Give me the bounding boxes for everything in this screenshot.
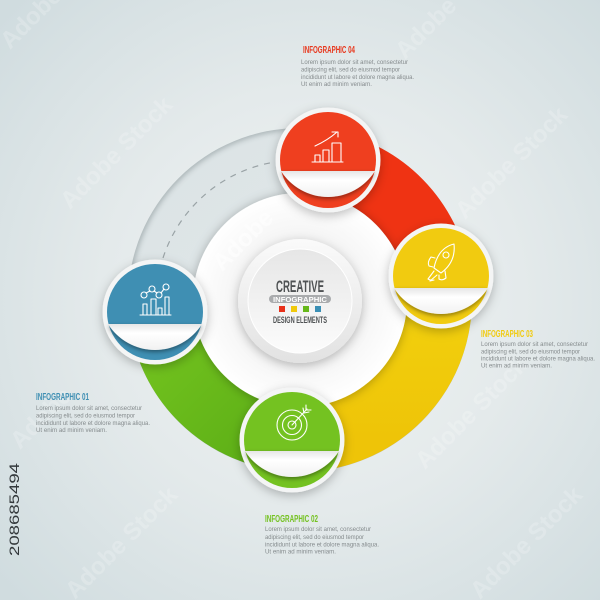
watermark: Adobe Stock <box>450 101 573 224</box>
text block: infographic 01: Ut enim ad minim veniam. <box>36 428 107 434</box>
text block: infographic 02: Lorem ipsum dolor sit amet, consectetur <box>265 527 371 533</box>
ring segment: yellow <box>292 276 439 439</box>
text block: infographic 02: adipiscing elit, sed do eiusmod tempor <box>265 535 364 541</box>
text block: infographic 03: incididunt ut labore et dolore magna aliqua. <box>481 356 595 362</box>
center subtitle: DESIGN ELEMENTS <box>273 315 327 326</box>
text block: infographic 04: adipiscing elit, sed do eiusmod tempor <box>301 68 400 74</box>
text block: infographic 04: incididunt ut labore et dolore magna aliqua. <box>301 75 414 81</box>
inner white disc <box>193 193 407 407</box>
ring segment: green <box>161 312 292 439</box>
icon: growth chart <box>312 132 343 162</box>
center title: CREATIVE <box>276 278 324 296</box>
ring: gray base <box>127 127 473 473</box>
watermark: Adobe Stock <box>195 141 318 264</box>
text block: infographic 04: INFOGRAPHIC 04 <box>303 45 355 56</box>
text block: infographic 01: adipiscing elit, sed do eiusmod tempor <box>36 414 135 420</box>
text block: infographic 03: INFOGRAPHIC 03 <box>481 329 533 340</box>
text block: infographic 01: Lorem ipsum dolor sit amet, consectetur <box>36 406 142 412</box>
text block: infographic 01: INFOGRAPHIC 01 <box>36 392 89 403</box>
inner disc watermark: Adobe <box>207 204 279 276</box>
text block: infographic 01 <box>36 392 150 434</box>
badge: green <box>240 388 344 492</box>
text block: infographic 04 <box>301 45 414 88</box>
text block: infographic 04: Ut enim ad minim veniam. <box>301 82 372 88</box>
center colour squares <box>279 306 321 312</box>
icon: target <box>277 405 311 440</box>
watermark: Adobe Stock <box>410 351 533 474</box>
text block: infographic 03 <box>481 329 595 370</box>
text block: infographic 02: Ut enim ad minim veniam. <box>265 550 336 556</box>
badge: red <box>276 108 380 212</box>
center disc <box>238 239 362 363</box>
text block: infographic 02: INFOGRAPHIC 02 <box>265 514 318 525</box>
text block: infographic 01: incididunt ut labore et dolore magna aliqua. <box>36 421 150 427</box>
text block: infographic 02 <box>265 514 379 556</box>
icon: rocket <box>428 244 454 281</box>
ring segment: red <box>327 163 438 276</box>
stock id: 208685494 <box>6 463 22 556</box>
watermark: Adobe <box>5 382 77 454</box>
dashed path <box>163 162 275 258</box>
text block: infographic 02: incididunt ut labore et dolore magna aliqua. <box>265 542 379 548</box>
badge: yellow <box>388 224 494 328</box>
text block: infographic 03: Lorem ipsum dolor sit amet, consectetur <box>481 342 588 348</box>
text block: infographic 04: Lorem ipsum dolor sit amet, consectetur <box>301 60 408 66</box>
watermark: Adobe Stock <box>55 91 178 214</box>
text block: infographic 03: Ut enim ad minim veniam. <box>481 364 552 370</box>
center pill: INFOGRAPHIC <box>273 295 328 304</box>
text block: infographic 03: adipiscing elit, sed do eiusmod tempor <box>481 350 580 356</box>
icon: chart with nodes <box>140 284 171 315</box>
badge: blue <box>102 260 208 364</box>
